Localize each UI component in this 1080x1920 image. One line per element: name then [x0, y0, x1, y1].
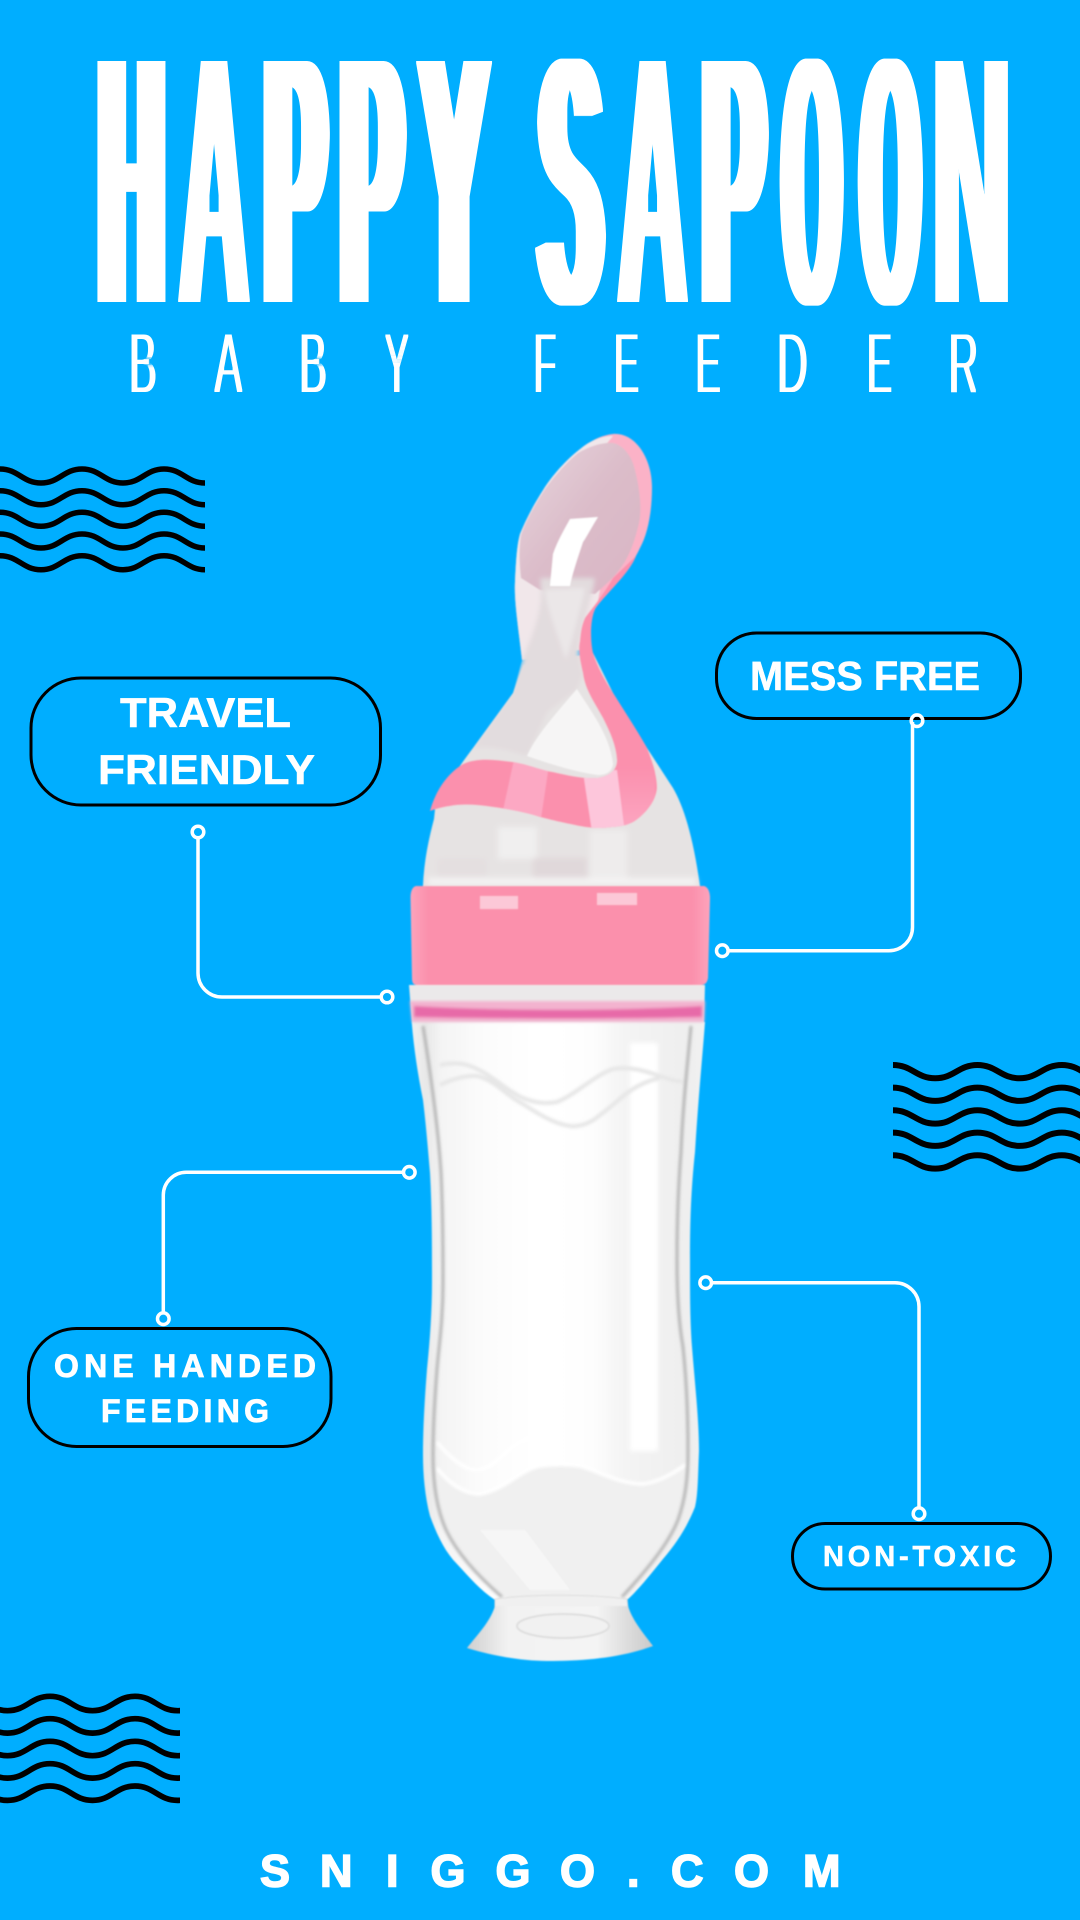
connector dot top [911, 715, 923, 726]
label: TRAVEL [120, 689, 291, 736]
label second line: FRIENDLY [98, 746, 315, 793]
label: MESS FREE [750, 653, 980, 699]
lower wave white lines [437, 1434, 687, 1494]
subtitle: B [299, 317, 327, 412]
product illustration: spoon feeder bottle [409, 434, 710, 1661]
title: O [781, 0, 843, 428]
footer website: SNIGGO.COM [260, 1846, 840, 1896]
pill outline [792, 1524, 1050, 1589]
connector dot end [716, 945, 728, 956]
subtitle: R [949, 316, 978, 412]
subtitle: A [214, 317, 242, 412]
bottle glass inner contour lines [423, 1026, 691, 1597]
label: NON-TOXIC [823, 1541, 1016, 1573]
subtitle: E [696, 316, 720, 412]
pill outline [31, 678, 380, 805]
lower ring [409, 985, 705, 1024]
cap lower panels [428, 827, 696, 885]
connector line [163, 1172, 404, 1313]
spoon bowl interior [520, 443, 640, 594]
subtitle: B [129, 317, 157, 412]
pink handle band [430, 556, 657, 828]
bowl highlight [550, 517, 598, 586]
callout: one handed feeding [28, 1166, 415, 1446]
bottle cap dome and spoon neck [423, 653, 700, 886]
callout: non-toxic [700, 1277, 1050, 1589]
lower glare [480, 1530, 570, 1590]
bottle collar [410, 886, 710, 985]
connector dot start [700, 1277, 712, 1288]
milk lower fill [437, 1464, 688, 1597]
spoon bowl rim [515, 434, 652, 660]
connector dot top [192, 826, 204, 838]
subtitle: E [867, 316, 892, 412]
connector dot end [381, 991, 393, 1003]
magenta seal band [410, 1001, 705, 1022]
connector line [712, 1283, 919, 1508]
suction foot [467, 1606, 653, 1661]
collar highlights [480, 893, 637, 909]
label second line: FEEDING [101, 1393, 269, 1429]
connector dot bottom [158, 1313, 169, 1324]
right vertical highlight [630, 1043, 658, 1451]
connector dot end [913, 1508, 925, 1519]
title: O [859, 0, 922, 427]
connector line [728, 722, 913, 951]
suction foot centre [517, 1614, 609, 1638]
white window in neck [527, 689, 613, 775]
subtitle: F [534, 316, 556, 413]
label: ONE HANDED [54, 1348, 316, 1384]
subtitle: Y [384, 316, 409, 412]
subtitle [129, 316, 978, 413]
upper wave lines [440, 1064, 683, 1126]
bottle body [412, 1022, 705, 1600]
pink band light stripes [504, 762, 654, 828]
bottom neck ring [495, 1595, 628, 1609]
callout: travel friendly [31, 678, 393, 1003]
title [100, 0, 1010, 428]
spoon stem [513, 576, 596, 692]
title: S [540, 0, 601, 428]
connector line [198, 838, 381, 997]
connector dot end [404, 1166, 415, 1178]
subtitle: E [614, 316, 639, 412]
spoon bowl left edge [515, 436, 613, 660]
callout: mess free [716, 633, 1020, 956]
pill outline [28, 1328, 331, 1446]
wave decoration: right [893, 1065, 1080, 1169]
wave decoration: bottom left [0, 1694, 180, 1804]
subtitle: D [777, 317, 808, 412]
pill outline [716, 633, 1020, 718]
wave decoration: top left [0, 469, 205, 570]
